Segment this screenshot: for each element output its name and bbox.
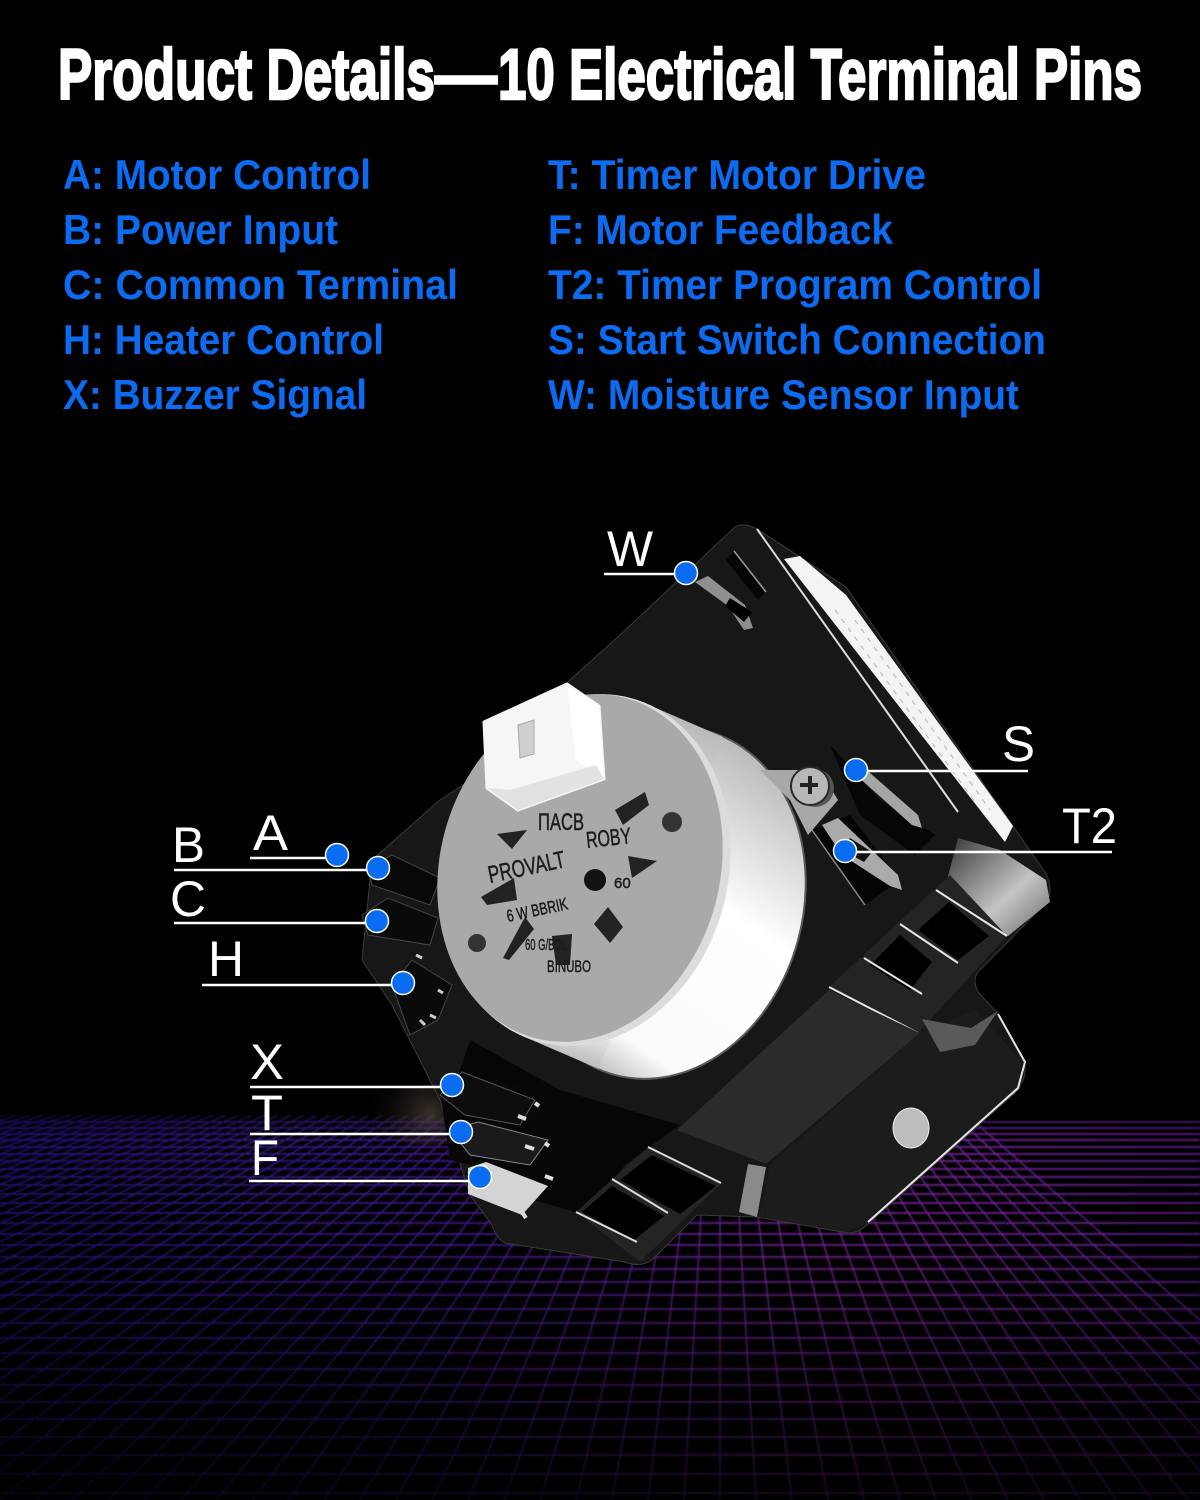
callout H: [202, 931, 414, 994]
white connector block: [484, 684, 604, 810]
face text: PROVALT: [486, 846, 568, 889]
callout X: [250, 1034, 464, 1096]
title: Product Details: [58, 36, 435, 115]
face text: [486, 809, 632, 976]
upper right housing block: [829, 875, 1007, 1033]
face text: ΠACB: [538, 809, 584, 836]
terminal S: [830, 745, 935, 855]
motor cylinder body: [478, 694, 844, 1112]
callout W: [604, 521, 698, 584]
terminal legend: right column: W: Moisture Sensor Input: [548, 371, 1019, 418]
face text: 60 G/BOL: [525, 937, 567, 954]
callout B: [172, 817, 390, 880]
face text: BINUBO: [547, 957, 591, 976]
callout T: T: [251, 1085, 283, 1141]
callout W: W: [607, 521, 654, 577]
terminal legend: left column: B: Power Input: [63, 206, 338, 253]
product: dryer timer: [362, 525, 1050, 1265]
terminal legend: right column: S: Start Switch Connection: [548, 316, 1046, 363]
callout T: [250, 1085, 472, 1144]
terminal legend: right column: T2: Timer Program Control: [548, 261, 1042, 308]
callout F: F: [251, 1130, 279, 1186]
title: [58, 36, 1142, 115]
callout B: B: [172, 817, 205, 873]
terminal legend: left column: H: Heater Control: [63, 316, 384, 363]
callout C: [170, 871, 388, 932]
silver back corner: [945, 838, 1050, 936]
terminal legend: left column: C: Common Terminal: [63, 261, 458, 308]
terminal legend: right column: [548, 151, 1046, 418]
callout X: X: [250, 1034, 284, 1090]
lower right bracket tab: [739, 1010, 1025, 1232]
lower bracket with slots: [576, 1147, 722, 1262]
shadow under motor: [450, 1040, 680, 1215]
terminal W: [695, 551, 766, 630]
mounting flange and screw: [760, 767, 838, 835]
lower centre housing block: [677, 990, 920, 1164]
callout H: H: [208, 931, 244, 987]
terminal legend: left column: [63, 151, 458, 418]
face text: 6 W BBRIK: [505, 894, 570, 926]
terminal legend: right column: F: Motor Feedback: [548, 206, 894, 253]
face text: 60: [614, 875, 631, 892]
title: —: [435, 36, 497, 115]
terminal T2: [812, 815, 902, 905]
terminal legend: left column: A: Motor Control: [63, 151, 371, 198]
left terminals A, B, C, H: [362, 855, 452, 1035]
soft glow at horizon: [360, 1085, 500, 1145]
callout S: S: [1002, 716, 1035, 772]
terminal legend: left column: X: Buzzer Signal: [63, 371, 367, 418]
terminal legend: right column: T: Timer Motor Drive: [548, 151, 926, 198]
callout T2: T2: [1062, 798, 1117, 854]
callout T2: [834, 798, 1117, 862]
back plate: [362, 525, 1050, 1265]
callout F: [249, 1130, 492, 1188]
callout A: [250, 805, 348, 866]
callout S: [844, 716, 1035, 782]
left terminals X, T, F: [440, 1070, 585, 1218]
face slots: [481, 792, 657, 965]
callout C: C: [170, 871, 206, 927]
white label strip: [784, 556, 1013, 842]
callout A: A: [253, 805, 289, 861]
face text: ROBY: [585, 822, 632, 853]
motor front face: [399, 661, 769, 1079]
side wall edge highlight: [757, 529, 958, 812]
perspective purple grid floor: [0, 1112, 1200, 1500]
mounting hole: [893, 1108, 929, 1148]
